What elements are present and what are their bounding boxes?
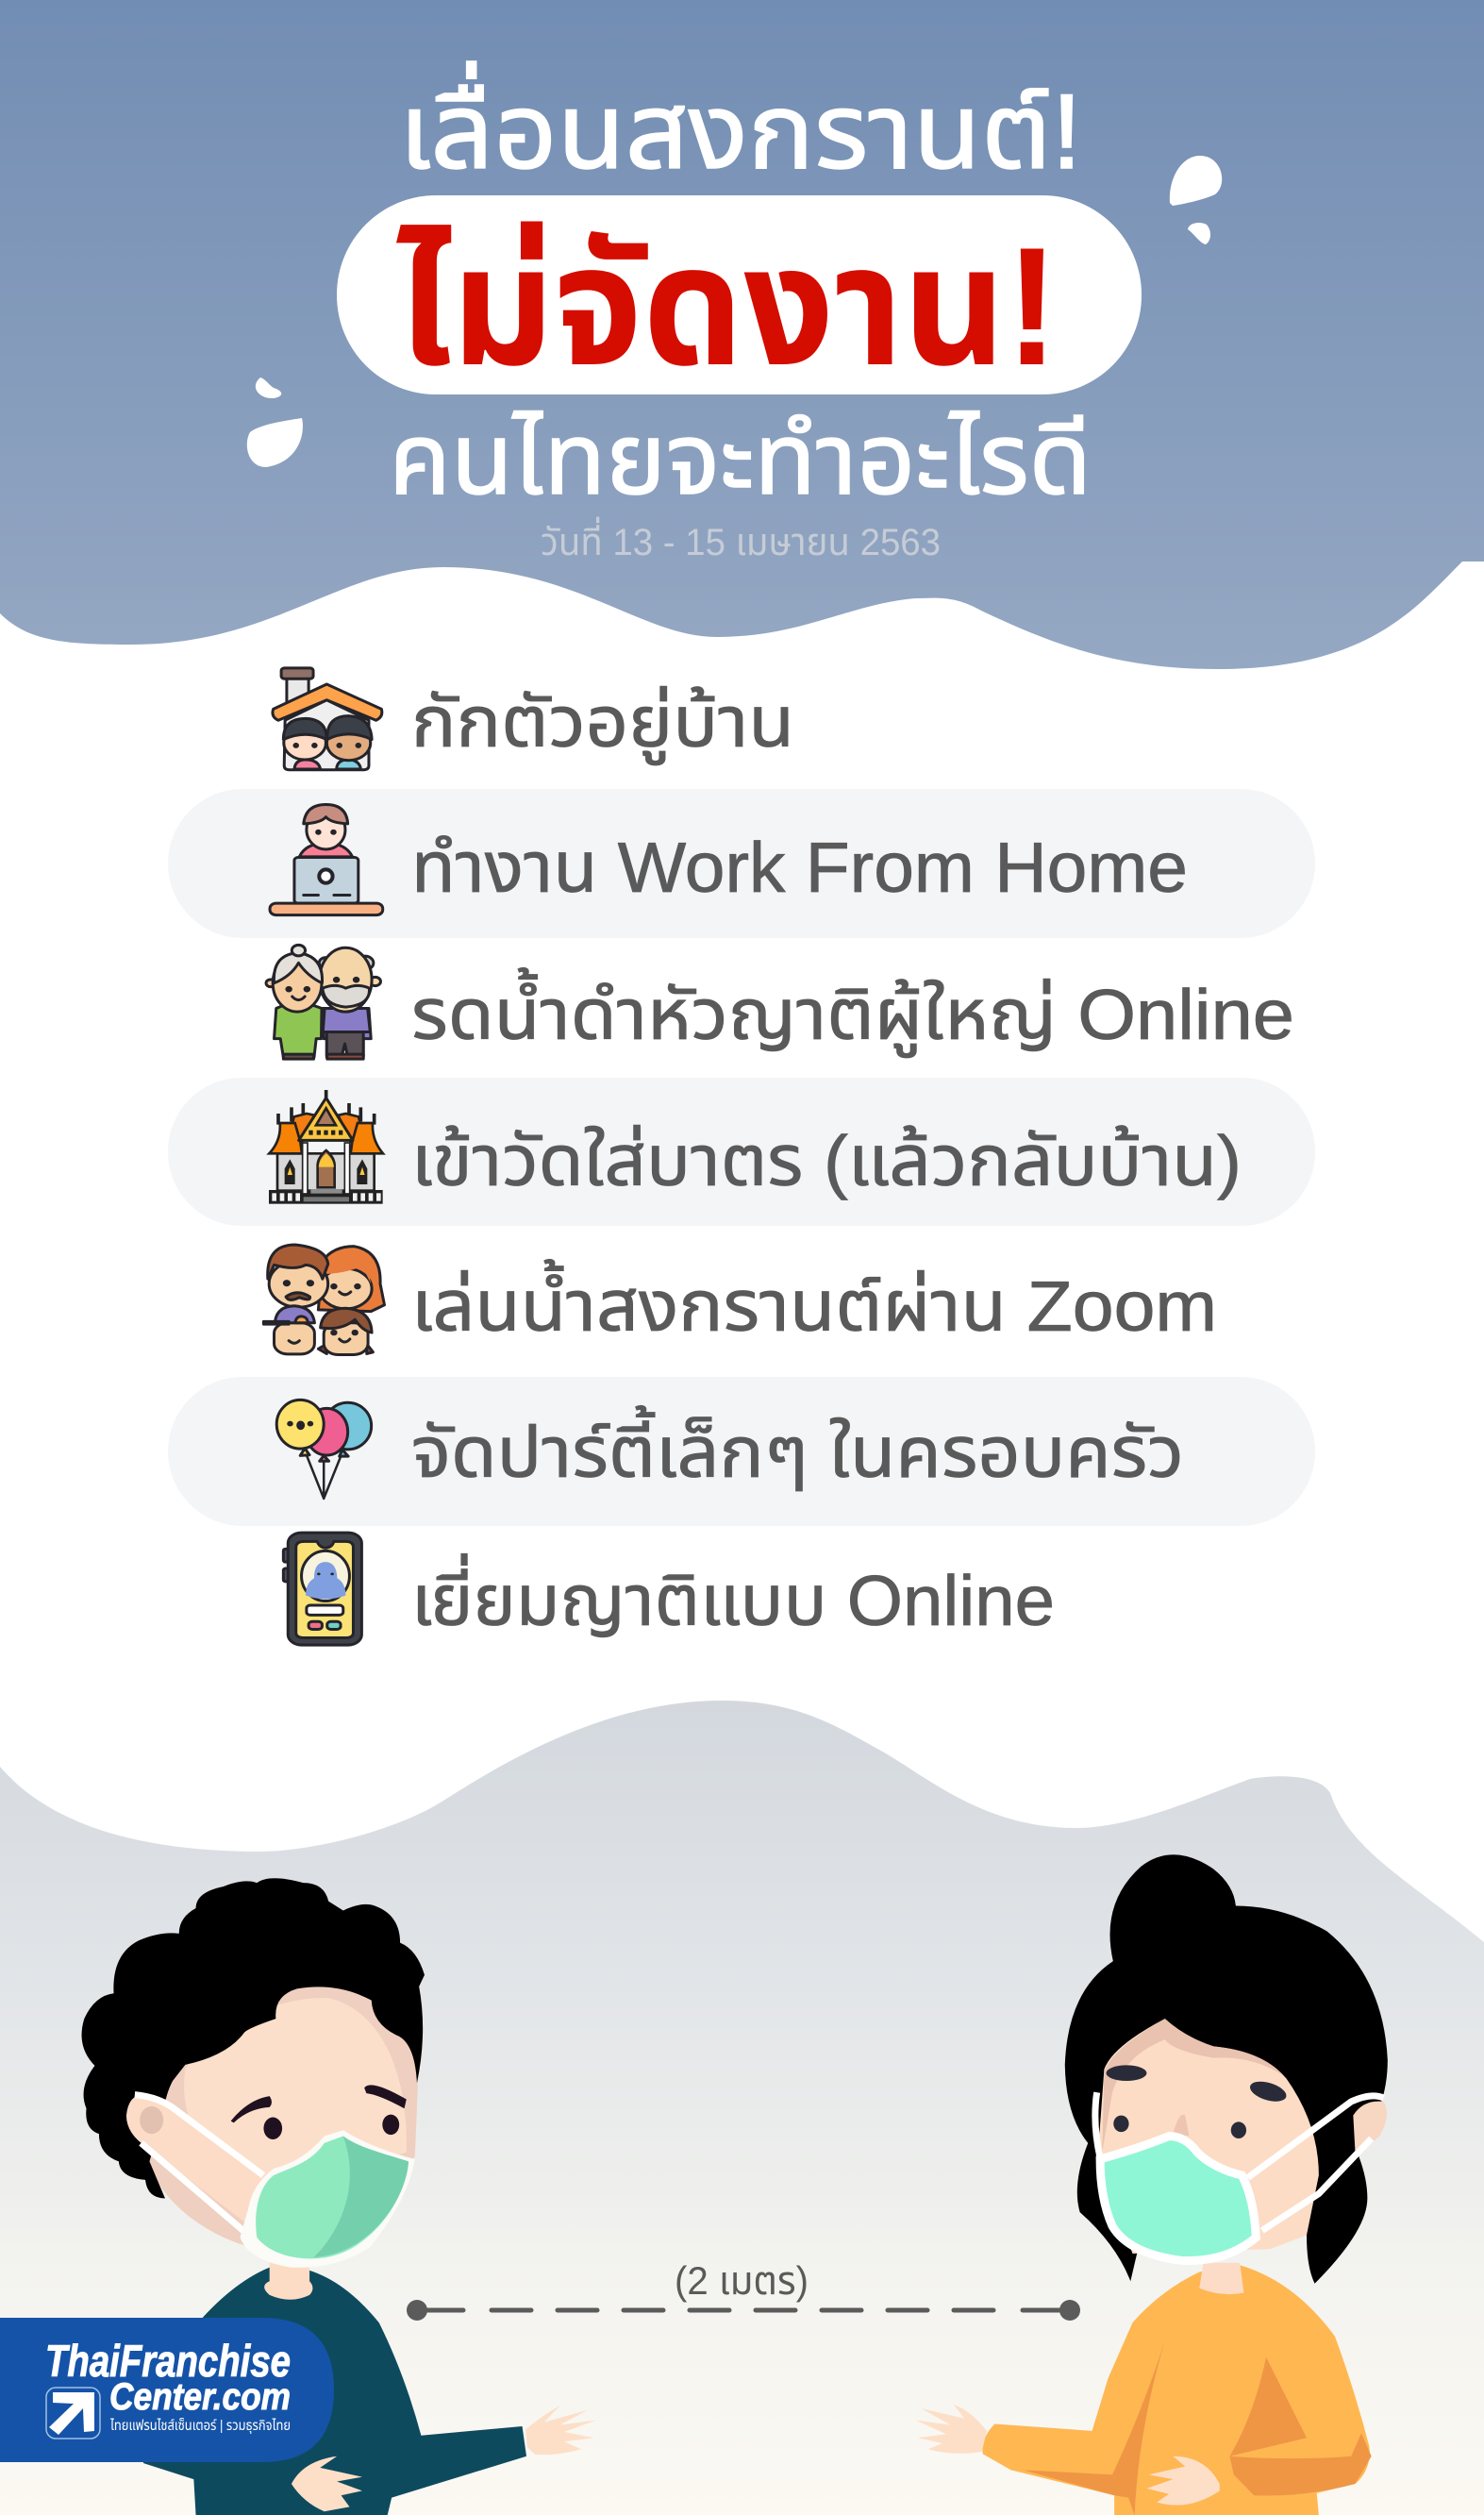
row highlight pills [168, 789, 1315, 1526]
logo badge: ไทยแฟรนไชส์เซ็นเตอร์ | รวมธุรกิจไทย [109, 2417, 291, 2434]
title pill [337, 195, 1142, 394]
text: temple alms: เข้าวัดใส่บาตร (แล้วกลับบ้าน) [411, 1121, 1242, 1200]
panel: top wave header [0, 0, 1484, 669]
man mask straps [135, 2095, 263, 2235]
icon: family faces [263, 1245, 384, 1355]
illustration: man with mask [82, 1878, 596, 2515]
woman neck [1199, 2263, 1243, 2294]
logo text: ThaiFranchise [45, 2336, 291, 2386]
logo badge: Center.com [109, 2376, 291, 2418]
panel: bottom wave background [0, 1701, 1484, 2515]
title line 2: ไม่จัดงาน! [396, 212, 1059, 400]
man arm hand [525, 2406, 596, 2455]
icon: water drops left [247, 377, 303, 467]
icon: person on laptop [270, 804, 383, 915]
text: small family party: จัดปาร์ตี้เล็กๆ ในครอบครัว [411, 1405, 1184, 1492]
man sweater [143, 2268, 526, 2515]
text: zoom songkran: เล่นน้ำสงกรานต์ผ่าน Zoom [411, 1259, 1217, 1346]
distance line with end dots [407, 2300, 1080, 2321]
woman ear [1353, 2102, 1387, 2153]
man mask [240, 2130, 415, 2268]
man neck [264, 2263, 312, 2300]
man hair [82, 1878, 425, 2198]
icon: elderly couple [266, 945, 380, 1059]
woman mask [1100, 2137, 1256, 2261]
man eyes and brows [231, 2085, 407, 2139]
date line: วันที่ 13 - 15 เมษายน 2563 [541, 516, 941, 563]
woman arm hand [916, 2405, 987, 2454]
icon: balloons [276, 1400, 372, 1499]
woman sweater shading [1024, 2341, 1372, 2515]
text: stay home: กักตัวอยู่บ้าน [411, 682, 794, 765]
title line 1: เลื่อนสงกรานต์! [399, 60, 1082, 191]
man lower hand [292, 2456, 362, 2511]
icon: temple [269, 1090, 383, 1204]
logo badge [0, 2318, 334, 2462]
icon: family in house [273, 668, 382, 770]
distance label: (2 เมตร) [675, 2258, 809, 2303]
woman sweater [982, 2265, 1370, 2515]
icon: water drops right [1170, 156, 1222, 244]
man face [149, 1968, 418, 2254]
text: work from home: ทำงาน Work From Home [411, 828, 1188, 907]
man ear [126, 2095, 263, 2228]
woman lower hand [1146, 2456, 1220, 2506]
title line 3: คนไทยจะทำอะไรดี [389, 404, 1092, 515]
icon: phone video call [283, 1533, 361, 1645]
logo arrow [46, 2388, 100, 2439]
illustration: woman with mask [916, 1854, 1388, 2515]
text: water pouring online: รดน้ำดำหัวญาติผู้ใหญ่ Online [411, 967, 1294, 1058]
woman mask straps [1248, 2096, 1384, 2231]
text: visit relatives online: เยี่ยมญาติแบบ Online [411, 1553, 1055, 1640]
woman face [1098, 2019, 1319, 2254]
woman eyes and brows [1107, 2065, 1288, 2138]
woman hair [1065, 1854, 1388, 2284]
